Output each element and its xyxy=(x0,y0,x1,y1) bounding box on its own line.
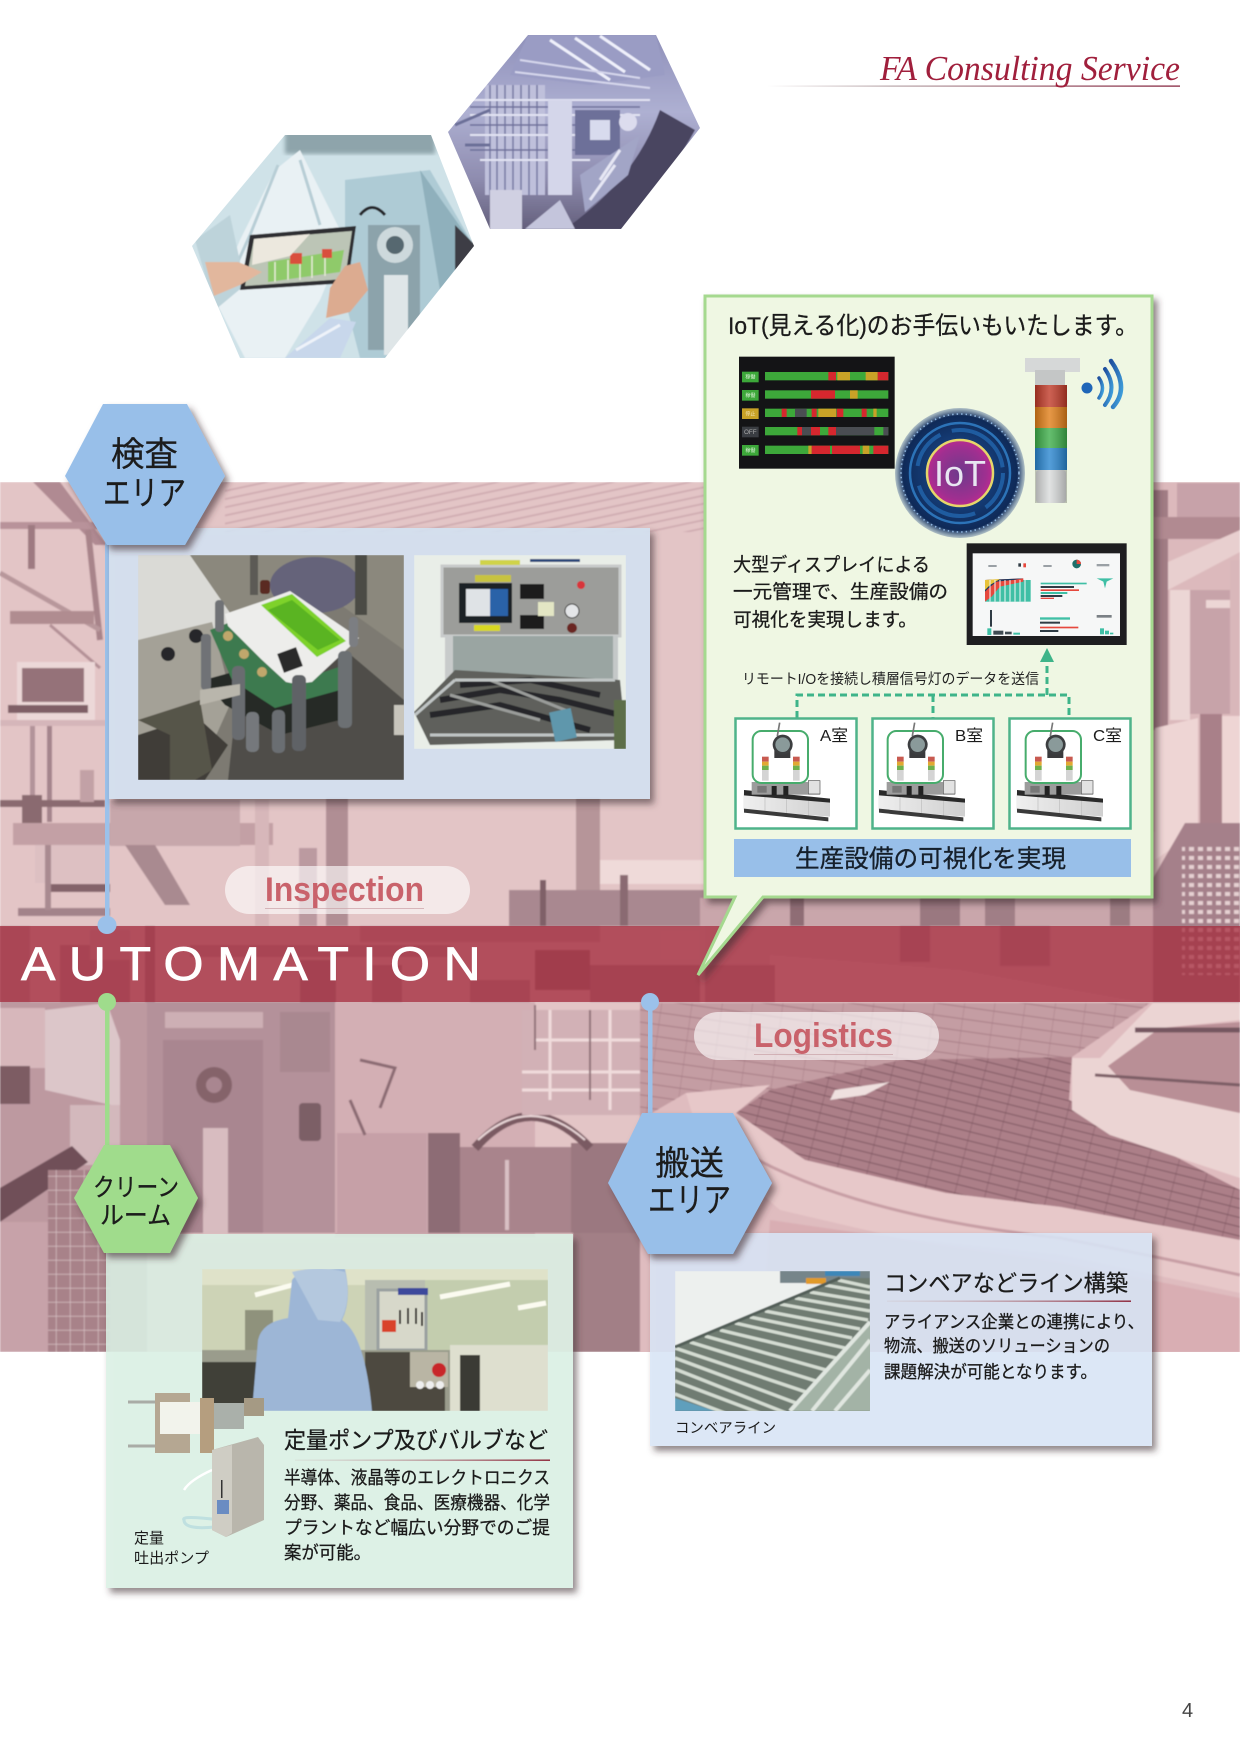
status bar dashboard: 稼働 xyxy=(745,374,755,381)
status bar dashboard: 停止 xyxy=(745,410,755,417)
background factory photo band xyxy=(0,482,1240,1353)
room B box xyxy=(872,718,994,828)
body text: logistics: アライアンス企業との連携により、 xyxy=(884,1312,1144,1332)
pill label: Inspection xyxy=(225,866,470,914)
hexagon: inspection area xyxy=(65,404,225,545)
red AUTOMATION band xyxy=(0,926,1240,1002)
room C box xyxy=(1010,718,1130,828)
hexagon: inspection area: エリア xyxy=(103,475,186,513)
hexagon: inspection area: 検査 xyxy=(111,436,178,474)
status bar dashboard: OFF xyxy=(744,429,757,436)
pill label: Logistics xyxy=(694,1012,939,1060)
top right heading: FA Consulting Service: FA Consulting Service xyxy=(879,49,1180,88)
photo: conveyor line xyxy=(675,1271,872,1415)
banner: production visualization: 生産設備の可視化を実現 xyxy=(795,845,1066,873)
photo hexagon: factory interior xyxy=(448,35,700,229)
photo: valve pump xyxy=(128,1393,264,1453)
body text: clean room: 分野、薬品、食品、医療機器、化学 xyxy=(284,1493,550,1513)
room C box: C室 xyxy=(1093,727,1122,745)
icon: IoT circle badge: IoT xyxy=(934,453,986,494)
photo: metering discharge pump xyxy=(184,1437,264,1537)
caption: conveyor line: コンベアライン xyxy=(675,1421,776,1437)
body text: logistics: 物流、搬送のソリューションの xyxy=(884,1336,1110,1356)
room A box: A室 xyxy=(820,727,848,745)
photo: circuit board on jig xyxy=(138,555,408,780)
body text: logistics xyxy=(884,1312,1144,1382)
caption: metering pump xyxy=(134,1530,209,1567)
caption: metering pump: 定量 xyxy=(134,1530,164,1547)
body text: clean room: プラントなど幅広い分野でのご提 xyxy=(284,1518,550,1538)
icon: IoT circle badge xyxy=(895,408,1025,538)
hexagon: logistics area: 搬送 xyxy=(655,1145,724,1183)
hexagon: logistics area: エリア xyxy=(648,1182,731,1220)
caption: remote I/O: リモートI/Oを接続し積層信号灯のデータを送信 xyxy=(742,670,1039,688)
text: large display description: 一元管理で、生産設備の xyxy=(733,581,948,603)
connector line: inspection area xyxy=(98,540,116,934)
body text: clean room: 半導体、液晶等のエレクトロニクス xyxy=(284,1468,550,1488)
hexagon: clean room: クリーン xyxy=(93,1174,179,1202)
icon: wireless signal xyxy=(1082,361,1121,407)
photo: inspection machine xyxy=(414,555,626,749)
pill label: Logistics: Logistics xyxy=(754,1017,893,1055)
AUTOMATION title: AUTOMATION xyxy=(21,938,481,990)
connector line: logistics xyxy=(641,993,659,1117)
text: large display description xyxy=(733,554,948,631)
hexagon: logistics area xyxy=(608,1113,772,1254)
hexagon: clean room: ルーム xyxy=(100,1202,171,1230)
caption: metering pump: 吐出ポンプ xyxy=(134,1550,209,1567)
room A box xyxy=(736,718,856,828)
pill label: Inspection: Inspection xyxy=(265,871,424,909)
hexagon: clean room xyxy=(74,1145,198,1253)
arrow: data flow to display xyxy=(797,648,1069,718)
heading: conveyor line construction: コンベアなどライン構築 xyxy=(884,1270,1128,1296)
status bar dashboard: 稼働 xyxy=(745,447,755,454)
text: large display description: 大型ディスプレイによる xyxy=(733,554,930,576)
status bar dashboard xyxy=(739,357,895,469)
body text: logistics: 課題解決が可能となります。 xyxy=(884,1362,1097,1382)
panel: logistics xyxy=(650,1233,1152,1446)
banner: production visualization xyxy=(734,839,1131,877)
body text: clean room: 案が可能。 xyxy=(284,1543,371,1563)
body text: clean room xyxy=(284,1468,550,1563)
large display dashboard xyxy=(967,543,1127,645)
text: large display description: 可視化を実現します。 xyxy=(733,609,917,631)
photo hexagon: tablet in factory xyxy=(190,130,480,360)
callout panel: IoT visualization xyxy=(698,296,1152,975)
heading: metering pumps and valves: 定量ポンプ及びバルブなど xyxy=(284,1427,548,1453)
icon: signal tower light xyxy=(1025,358,1080,503)
photo: clean room operator xyxy=(202,1268,548,1411)
room B box: B室 xyxy=(955,727,983,745)
connector line: clean room xyxy=(98,993,116,1147)
panel: inspection area xyxy=(109,528,650,799)
callout heading: IoT(見える化)のお手伝いもいたします。 xyxy=(728,312,1138,340)
panel: clean room xyxy=(106,1234,573,1588)
status bar dashboard: 稼働 xyxy=(745,392,755,399)
page number: 4 xyxy=(1182,1700,1193,1722)
